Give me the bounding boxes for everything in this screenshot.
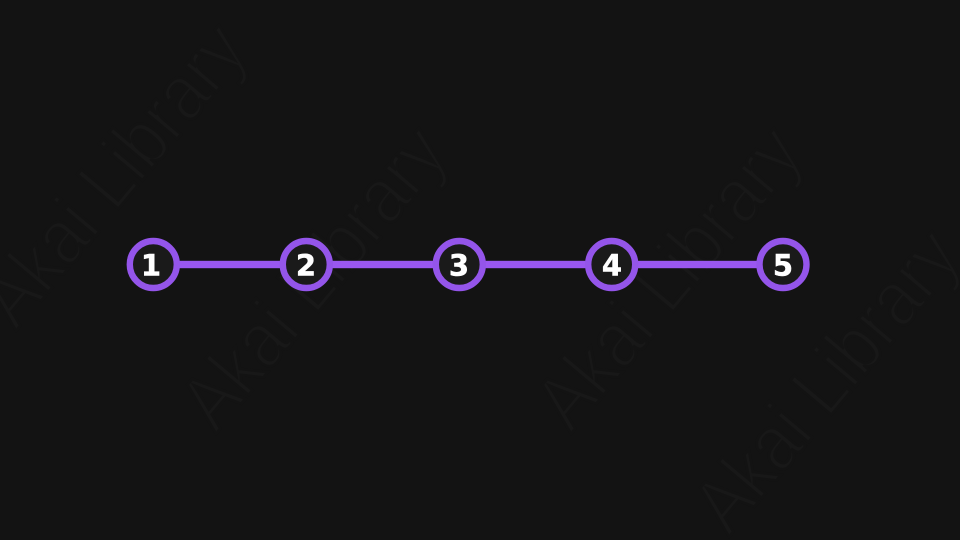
step 2 [283, 241, 330, 288]
connector line [153, 261, 783, 268]
watermark 3: Akai Library [517, 109, 819, 445]
step 2: 2 [296, 248, 316, 282]
watermark 2: Akai Library [162, 109, 464, 445]
step 3: 3 [449, 248, 469, 282]
step 5 [760, 241, 806, 288]
step 5: 5 [773, 248, 793, 282]
step 1 [130, 241, 177, 288]
step 1: 1 [141, 248, 161, 282]
timeline [130, 241, 807, 288]
step 4 [588, 241, 635, 288]
step 3 [436, 241, 483, 288]
step 4: 4 [602, 248, 622, 282]
